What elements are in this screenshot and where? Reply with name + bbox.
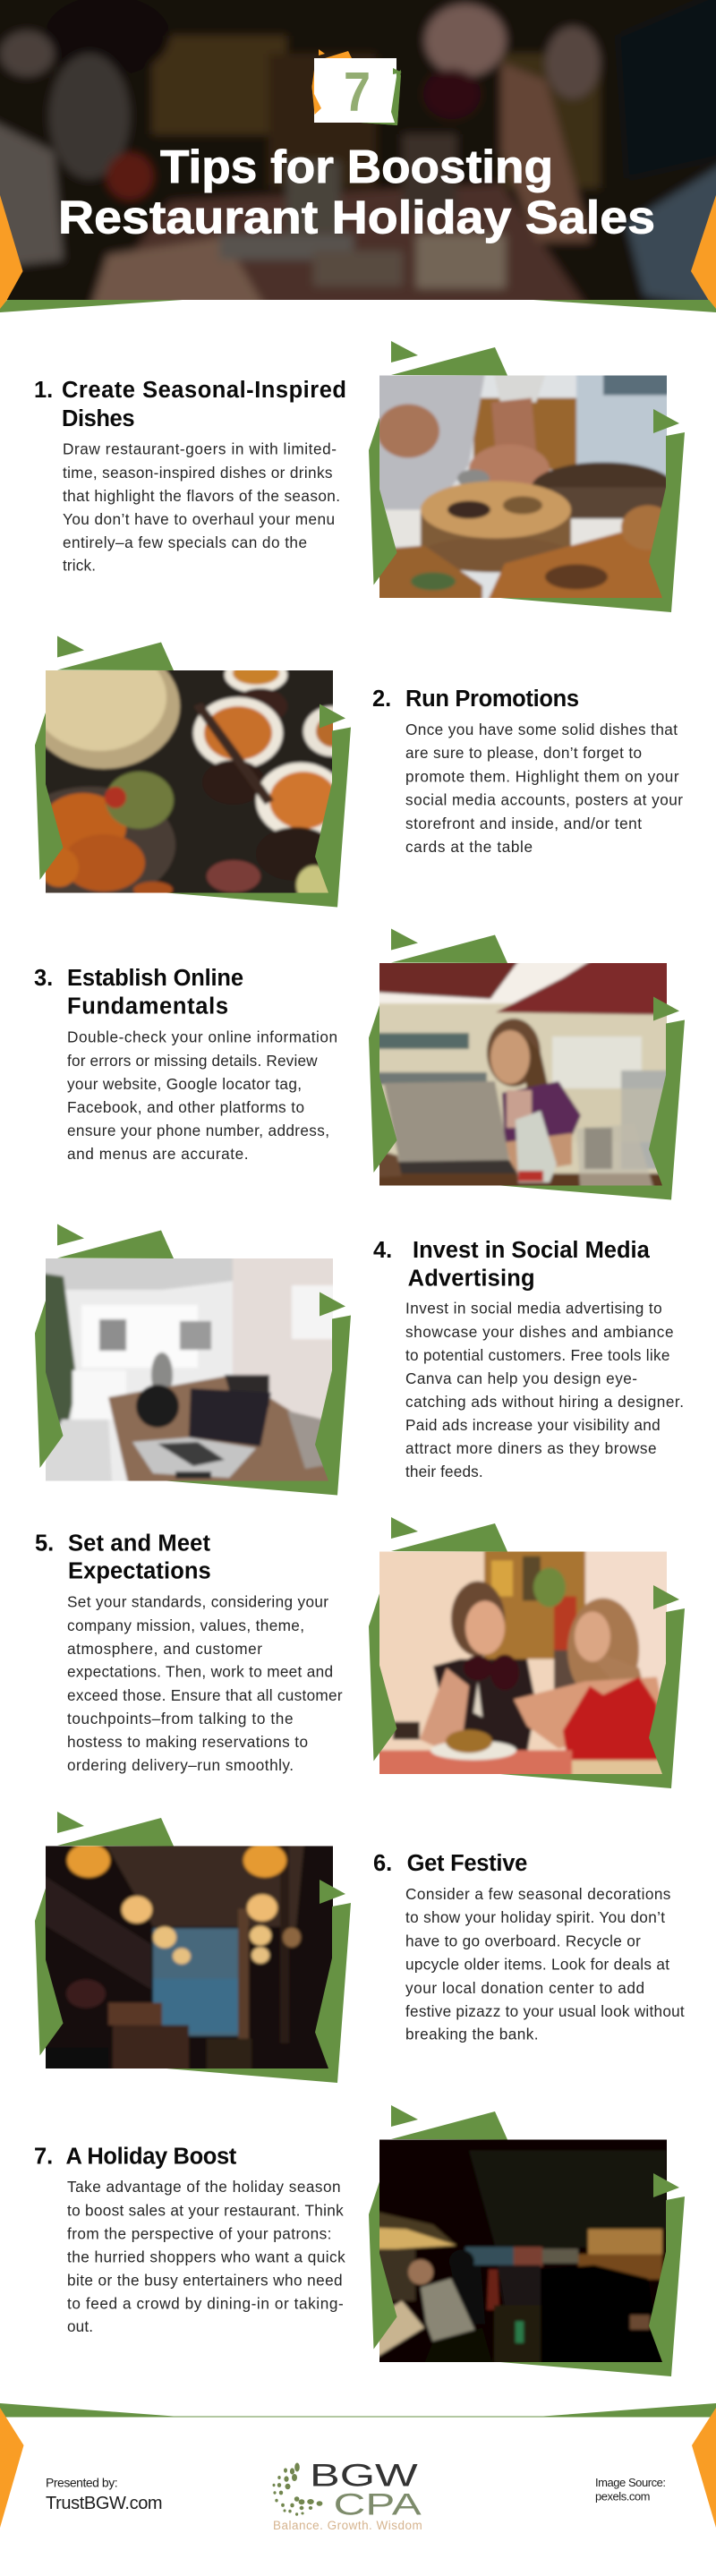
- body: tip 6: festive pizazz to your usual look without: [405, 2002, 685, 2020]
- body: tip 5: expectations. Then, work to meet and: [67, 1663, 333, 1681]
- heading: tip 1: Dishes: [62, 406, 134, 431]
- body: tip 1: time, season-inspired dishes or drinks: [63, 464, 333, 482]
- heading: tip 3: Establish Online: [67, 966, 243, 991]
- body: tip 3: ensure your phone number, address,: [67, 1122, 329, 1139]
- body: tip 4: showcase your dishes and ambiance: [405, 1323, 673, 1341]
- tip 5 text: [35, 1531, 343, 1774]
- body: tip 6: Consider a few seasonal decorations: [405, 1885, 670, 1903]
- body: tip 4: [405, 1300, 684, 1480]
- logo: BGW CPA: CPA: [334, 2487, 422, 2521]
- body: tip 2: are sure to please, don’t forget to: [405, 744, 642, 762]
- logo: BGW CPA: [272, 2458, 422, 2532]
- body: tip 6: have to go overboard. Recycle or: [405, 1932, 641, 1949]
- logo: BGW CPA: Balance. Growth. Wisdom: [273, 2519, 422, 2532]
- heading: tip 3: 3.: [34, 966, 53, 991]
- body: tip 2: storefront and inside, and/or tent: [405, 815, 642, 832]
- tip 2 image: Indian food spread: [35, 635, 351, 908]
- heading: tip 6: 6.: [373, 1851, 392, 1876]
- presented by: [46, 2476, 163, 2513]
- heading: tip 6: Get Festive: [407, 1851, 527, 1876]
- logo: BGW CPA: BGW: [310, 2458, 418, 2493]
- body: tip 4: their feeds.: [405, 1463, 483, 1480]
- body: tip 2: social media accounts, posters at your: [405, 791, 683, 809]
- body: tip 1: [63, 440, 340, 575]
- body: tip 7: [67, 2178, 345, 2335]
- heading: tip 4: 4.: [373, 1238, 392, 1263]
- body: tip 7: to feed a crowd by dining-in or taking-: [67, 2295, 344, 2313]
- body: tip 2: [405, 721, 683, 856]
- body: tip 7: Take advantage of the holiday season: [67, 2178, 341, 2196]
- body: tip 1: Draw restaurant-goers in with limited-: [63, 440, 337, 458]
- body: tip 5: hostess to making reservations to: [67, 1733, 308, 1751]
- heading: tip 1: Create Seasonal-Inspired: [62, 378, 346, 403]
- orange side shape left: [0, 195, 23, 312]
- body: tip 3: Facebook, and other platforms to: [67, 1098, 304, 1116]
- heading: tip 5: [35, 1531, 211, 1584]
- body: tip 3: and menus are accurate.: [67, 1145, 249, 1163]
- tip 7 image: crowded bar at night: [366, 2105, 685, 2376]
- body: tip 1: trick.: [63, 557, 96, 575]
- body: tip 5: ordering delivery–run smoothly.: [67, 1756, 294, 1774]
- heading: tip 4: [373, 1238, 651, 1291]
- body: tip 7: the hurried shoppers who want a quick: [67, 2248, 345, 2266]
- heading: tip 3: Fundamentals: [67, 994, 228, 1019]
- body: tip 6: upcycle older items. Look for deals at: [405, 1956, 669, 1974]
- tip 4 text: [373, 1238, 684, 1480]
- heading: tip 2: Run Promotions: [405, 687, 579, 712]
- heading: tip 5: 5.: [35, 1531, 54, 1557]
- heading: tip 1: [34, 378, 346, 431]
- tip 6 image: dark restaurant with pendant lamps: [32, 1812, 351, 2083]
- body: tip 5: [67, 1593, 343, 1774]
- tip 1 text: [34, 378, 346, 575]
- tip 4 image: bright office with laptops: [32, 1224, 351, 1495]
- body: tip 1: that highlight the flavors of the season.: [63, 487, 340, 505]
- header banner: [0, 0, 716, 327]
- body: tip 4: Canva can help you design eye-: [405, 1369, 637, 1387]
- title: [58, 141, 655, 243]
- heading: tip 7: 7.: [34, 2145, 53, 2170]
- tip 5 image: two women toasting wine: [366, 1517, 685, 1788]
- body: tip 5: company mission, values, theme,: [67, 1616, 304, 1634]
- body: tip 6: your local donation center to add: [405, 1979, 644, 1997]
- body: tip 5: touchpoints–from talking to the: [67, 1710, 294, 1727]
- number badge: [311, 49, 402, 125]
- body: tip 7: to boost sales at your restaurant. Think: [67, 2201, 344, 2219]
- green strip under header: [0, 300, 716, 312]
- body: tip 7: bite or the busy entertainers who need: [67, 2271, 343, 2289]
- body: tip 4: to potential customers. Free tools like: [405, 1346, 669, 1364]
- heading: tip 2: 2.: [372, 687, 391, 712]
- footer: [0, 2403, 716, 2532]
- title: Tips for Boosting: [160, 141, 553, 193]
- heading: tip 7: A Holiday Boost: [66, 2145, 237, 2170]
- body: tip 5: Set your standards, considering your: [67, 1593, 328, 1611]
- body: tip 5: atmosphere, and customer: [67, 1640, 262, 1658]
- body: tip 3: your website, Google locator tag,: [67, 1075, 302, 1093]
- body: tip 3: for errors or missing details. Review: [67, 1052, 318, 1070]
- tip 2 text: [372, 687, 683, 856]
- body: tip 6: [405, 1885, 685, 2043]
- header photo: restaurant toast: [0, 0, 716, 327]
- body: tip 3: [67, 1028, 337, 1163]
- body: tip 1: entirely–a few specials can do the: [63, 533, 307, 551]
- body: tip 6: breaking the bank.: [405, 2026, 539, 2043]
- body: tip 3: Double-check your online information: [67, 1028, 337, 1046]
- tip 3 text: [34, 966, 337, 1163]
- orange side shape right: [691, 195, 716, 312]
- image source: pexels.com: [595, 2490, 650, 2503]
- image source: Image Source:: [595, 2476, 666, 2489]
- tip 6 text: [373, 1851, 685, 2043]
- heading: tip 4: Invest in Social Media: [413, 1238, 651, 1263]
- body: tip 2: cards at the table: [405, 838, 533, 856]
- tip 3 image: woman with laptop and phone: [366, 929, 685, 1199]
- body: tip 5: exceed those. Ensure that all customer: [67, 1686, 343, 1704]
- heading: tip 3: [34, 966, 243, 1019]
- heading: tip 4: Advertising: [408, 1266, 535, 1291]
- body: tip 4: attract more diners as they browse: [405, 1439, 657, 1457]
- tip 7 text: [34, 2145, 345, 2335]
- body: tip 1: You don’t have to overhaul your menu: [63, 510, 335, 528]
- image source: [595, 2476, 666, 2503]
- green strip above footer: [0, 2403, 716, 2417]
- orange side shape right: [692, 2408, 716, 2528]
- orange side shape left: [0, 2408, 23, 2528]
- presented by: TrustBGW.com: [46, 2494, 163, 2513]
- body: tip 4: Invest in social media advertising to: [405, 1300, 662, 1318]
- presented by: Presented by:: [46, 2476, 118, 2490]
- body: tip 4: catching ads without hiring a designer.: [405, 1393, 684, 1411]
- body: tip 2: promote them. Highlight them on your: [405, 768, 679, 786]
- body: tip 6: to show your holiday spirit. You don’t: [405, 1908, 665, 1926]
- tip 1 image: chef plating on wood: [366, 341, 685, 612]
- body: tip 7: from the perspective of your patrons:: [67, 2225, 331, 2243]
- heading: tip 1: 1.: [34, 378, 53, 403]
- title: Restaurant Holiday Sales: [58, 192, 655, 243]
- body: tip 7: out.: [67, 2317, 93, 2335]
- body: tip 2: Once you have some solid dishes that: [405, 721, 678, 738]
- number badge: 7: [344, 62, 371, 124]
- heading: tip 5: Set and Meet: [68, 1531, 211, 1557]
- heading: tip 5: Expectations: [68, 1559, 211, 1584]
- body: tip 4: Paid ads increase your visibility and: [405, 1416, 661, 1434]
